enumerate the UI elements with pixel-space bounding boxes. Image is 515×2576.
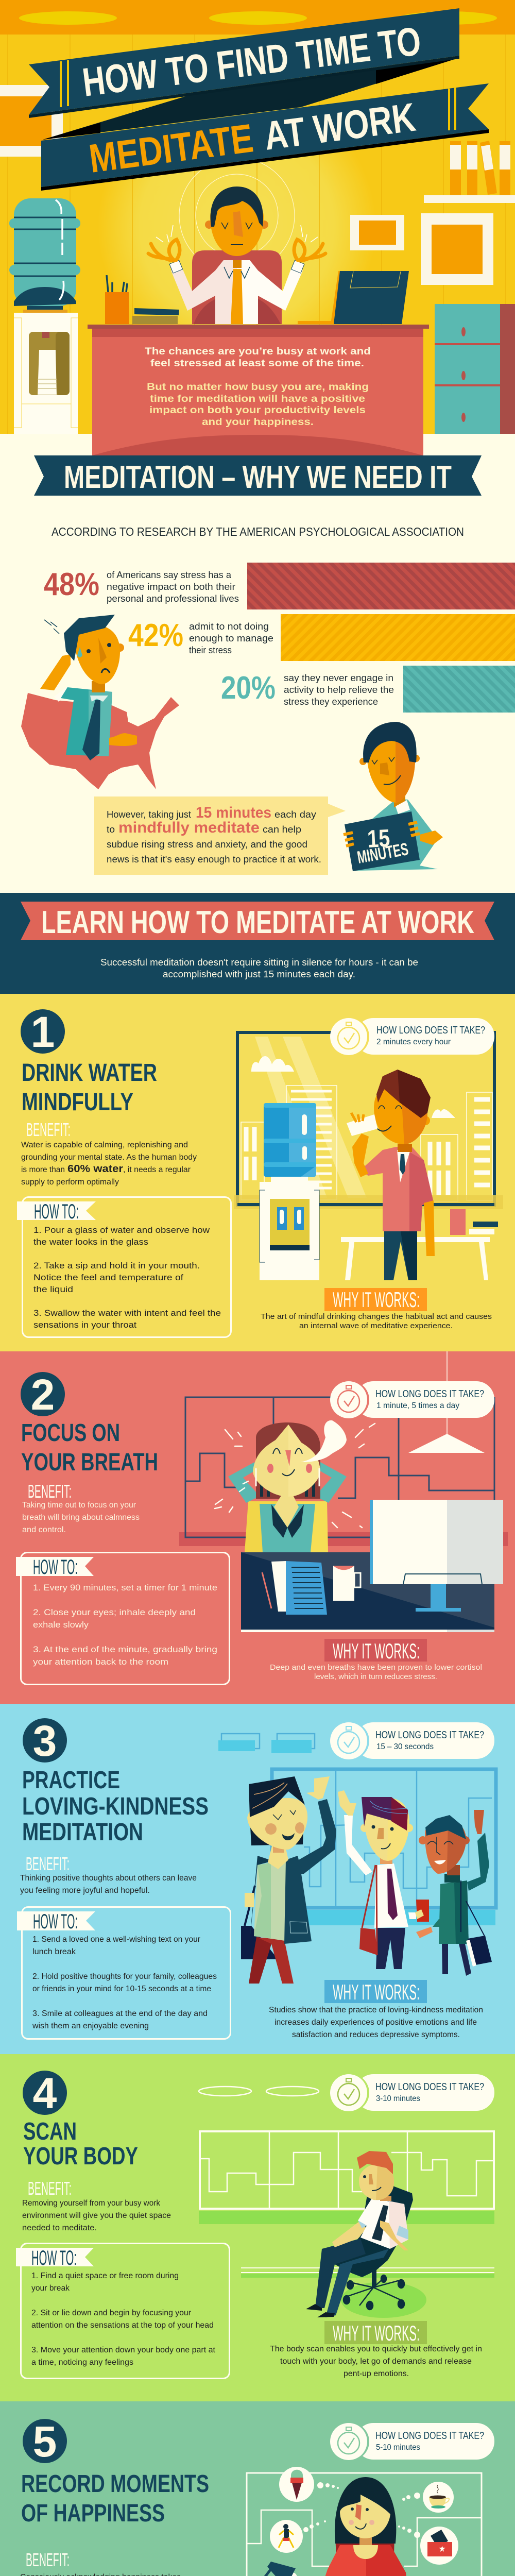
callout: 15 minutes: However, taking just (107, 809, 191, 820)
how to box: lunch break (32, 1947, 76, 1956)
how to box: or friends in your mind for 10-15 seconds at a time (32, 1985, 211, 1993)
desk items (105, 271, 409, 324)
stat bar 20%: 20% (221, 670, 276, 706)
why it works (269, 1980, 483, 2039)
usa map (21, 693, 179, 789)
figure: woman waving (241, 1776, 336, 1984)
how to box: a time, noticing any feelings (31, 2358, 133, 2367)
stat bar 48%: of Americans say stress has a (107, 570, 232, 580)
how to box: 3. Smile at colleagues at the end of the day and (32, 2009, 208, 2018)
duration pill: 5-10 minutes (376, 2443, 420, 2452)
heading: PRACTICE (22, 1767, 120, 1794)
number badge (21, 1008, 65, 1056)
figure: man holding 15 minutes sign (344, 722, 443, 871)
duration pill: HOW LONG DOES IT TAKE? (375, 1388, 484, 1400)
benefit: , it needs a regular (123, 1165, 191, 1174)
panel: desk with intro text: The chances are you’re busy at work and (145, 346, 371, 357)
callout: 15 minutes (94, 796, 346, 875)
benefit: supply to perform optimally (21, 1178, 119, 1187)
how to box: your attention back to the room (33, 1657, 168, 1667)
why it works: levels, which in turn reduces stress. (314, 1672, 437, 1681)
heading (22, 1767, 209, 1846)
how to box: the liquid (33, 1284, 73, 1294)
stat bar 42%: 42% (128, 618, 183, 653)
figure: man in office chair (306, 2151, 413, 2317)
how to box: your break (31, 2284, 70, 2293)
how to box: the water looks in the glass (33, 1237, 148, 1247)
benefit: you feeling more joyful and hopeful. (20, 1886, 150, 1895)
benefit: BENEFIT: (26, 1119, 71, 1140)
how to box: sensations in your throat (33, 1320, 136, 1330)
how to box: 3. At the end of the minute, gradually bring (33, 1645, 217, 1654)
heading: MINDFULLY (22, 1089, 133, 1116)
heading (22, 1059, 157, 1116)
figure: smiling colleague (416, 1810, 492, 1976)
duration pill: 15 – 30 seconds (376, 1742, 434, 1751)
why it works: Studies show that the practice of loving-kindness meditation (269, 2006, 483, 2014)
panel: desk with intro text: time for meditation will have a positive (150, 394, 365, 404)
subheading: ACCORDING TO RESEARCH BY THE AMERICAN PSYCHOLOGICAL ASSOCIATION (52, 525, 464, 538)
duration pill: 2 minutes every hour (376, 1038, 451, 1046)
how to box (17, 1197, 231, 1337)
how to box (16, 2243, 230, 2378)
benefit: Thinking positive thoughts about others can leave (20, 1874, 197, 1883)
callout: 15 minutes: to (107, 824, 115, 835)
callout: 15 minutes: can help (263, 824, 301, 835)
how to box: Notice the feel and temperature of (33, 1273, 183, 1282)
window scene (234, 1032, 503, 1209)
filing cabinet (435, 304, 515, 434)
benefit: BENEFIT: (28, 2178, 72, 2199)
icon: desk lamp (249, 2562, 297, 2576)
benefit: grounding your mental state. As the human body (21, 1153, 197, 1162)
how to box: 3. Move your attention down your body one part at (31, 2346, 216, 2354)
benefit: BENEFIT: (26, 2549, 70, 2570)
duration pill: 3-10 minutes (376, 2094, 420, 2103)
heading: FOCUS ON (21, 1419, 120, 1447)
heading (21, 2470, 209, 2527)
panel: desk with intro text: feel stressed at least some of the time. (150, 358, 364, 369)
figure: man holding 15 minutes sign: MINUTES (356, 839, 410, 868)
stat bar 20%: say they never engage in (284, 673, 393, 683)
intro text: Successful meditation doesn't require sitting in silence for hours - it can be (100, 957, 418, 968)
desk with monitor (241, 1500, 503, 1632)
duration pill (330, 2422, 494, 2461)
stat bar 20%: stress they experience (284, 697, 378, 707)
panel: step 2 focus on your breath (0, 1351, 515, 1704)
benefit (20, 2549, 181, 2576)
heading: DRINK WATER (22, 1059, 157, 1087)
benefit: is more than (21, 1165, 65, 1174)
stat bar 48%: negative impact on both their (107, 582, 235, 592)
how to box: HOW TO: (34, 1200, 79, 1223)
figure: meditating man at desk (148, 187, 325, 324)
table (341, 1209, 498, 1280)
why it works: an internal wave of meditative experience. (299, 1321, 453, 1330)
duration pill: HOW LONG DOES IT TAKE? (375, 1730, 484, 1741)
benefit: Water is capable of calming, replenishing and (21, 1141, 188, 1149)
benefit: Taking time out to focus on your (22, 1501, 136, 1510)
heading: OF HAPPINESS (21, 2500, 165, 2527)
intro text: accomplished with just 15 minutes each day. (163, 969, 355, 979)
why it works: WHY IT WORKS: (333, 1980, 420, 2004)
why it works: touch with your body, let go of demands and release (280, 2357, 472, 2366)
heading: RECORD MOMENTS (21, 2470, 209, 2498)
benefit: Removing yourself from your busy work (22, 2199, 160, 2208)
panel: step 4 scan your body (0, 2054, 515, 2401)
how to box: 1. Send a loved one a well-wishing text on your (32, 1935, 200, 1944)
heading: LOVING-KINDNESS (22, 1793, 209, 1820)
stat bar 48%: 48% (44, 567, 99, 602)
duration pill (330, 1018, 494, 1056)
ceiling with lights (0, 0, 515, 35)
benefit: BENEFIT: (28, 1481, 72, 1502)
office window outline (179, 1351, 508, 1546)
how to box: 1. Every 90 minutes, set a timer for 1 minute (33, 1583, 217, 1592)
why it works: WHY IT WORKS: (333, 1639, 420, 1663)
why it works: increases daily experiences of positive emotions and life (274, 2018, 477, 2027)
how to box (16, 1553, 230, 1685)
figure: man holding 15 minutes sign: 15 (367, 825, 391, 853)
callout: 15 minutes: 15 minutes (196, 804, 271, 821)
number badge (23, 1717, 67, 1765)
panel: step 3 loving-kindness (0, 1704, 515, 2054)
duration pill: HOW LONG DOES IT TAKE? (376, 1025, 485, 1036)
duration pill: 1 minute, 5 times a day (376, 1401, 459, 1410)
stat bar 42% (128, 614, 515, 661)
figure: man drinking water (347, 1070, 435, 1280)
benefit (20, 1853, 197, 1895)
why it works: satisfaction and reduces depressive symptoms. (292, 2030, 460, 2039)
panel: desk with intro text: and your happiness. (202, 417, 314, 428)
benefit (21, 1119, 197, 1187)
benefit: needed to meditate. (22, 2224, 97, 2232)
benefit: 60% water (67, 1163, 123, 1175)
figure: stressed man (40, 615, 137, 760)
how to box: 2. Hold positive thoughts for your family, colleagues (32, 1972, 217, 1981)
benefit (22, 1481, 140, 1534)
office window (238, 2473, 491, 2576)
wall picture left (0, 85, 63, 157)
why it works: WHY IT WORKS: (333, 2321, 420, 2345)
panel: step 5 record moments of happiness (0, 2401, 515, 2576)
panel: learn how to meditate (0, 893, 515, 994)
office window (199, 2131, 494, 2318)
office window (272, 1769, 496, 1925)
number badge: 5 (33, 2417, 57, 2466)
number badge (23, 2417, 67, 2466)
thought bubbles (270, 2467, 458, 2565)
ceiling lights outline (199, 2087, 319, 2096)
how to box: 2. Close your eyes; inhale deeply and (33, 1607, 196, 1617)
figure: woman breathing (215, 1420, 375, 1552)
panel: why we need it (0, 455, 515, 893)
duration pill (330, 1381, 494, 1419)
how to box: 2. Sit or lie down and begin by focusing your (31, 2309, 191, 2317)
how to box: 3. Swallow the water with intent and feel the (33, 1308, 221, 1318)
callout: 15 minutes: subdue rising stress and anxiety, and the good (107, 839, 307, 850)
benefit: environment will give you the quiet space (22, 2211, 171, 2220)
stat bar 42%: enough to manage (189, 633, 273, 643)
figure: woman journaling (317, 2477, 412, 2576)
number badge: 2 (31, 1370, 55, 1419)
heading: SCAN (23, 2118, 77, 2145)
intro text (100, 957, 418, 979)
number badge: 3 (33, 1717, 57, 1765)
how to box: exhale slowly (33, 1620, 89, 1630)
wall frames (350, 213, 493, 285)
heading: MEDITATION (22, 1819, 143, 1846)
duration pill: HOW LONG DOES IT TAKE? (375, 2430, 484, 2442)
shelf with binders (424, 141, 515, 203)
how to box: 2. Take a sip and hold it in your mouth. (33, 1261, 200, 1270)
heading: YOUR BODY (23, 2143, 138, 2170)
stat bar 42%: their stress (189, 645, 232, 655)
number badge: 1 (31, 1008, 55, 1056)
stat bar 42%: admit to not doing (189, 621, 269, 632)
heading (23, 2118, 138, 2170)
how to box: attention on the sensations at the top of your head (31, 2321, 214, 2330)
ceiling window deco (218, 1734, 315, 1753)
icon: water cooler (9, 198, 80, 434)
benefit: and control. (22, 1526, 66, 1534)
number badge (23, 2069, 67, 2117)
stat bar 20%: activity to help relieve the (284, 685, 394, 695)
callout: 15 minutes: mindfully meditate (118, 819, 260, 836)
number badge: 4 (33, 2069, 57, 2117)
title ribbon: HOW TO FIND TIME TO (80, 18, 423, 105)
stat bar 20% (221, 666, 515, 713)
benefit: BENEFIT: (26, 1853, 70, 1874)
how to box: HOW TO: (33, 1556, 78, 1579)
hands (148, 240, 325, 261)
title ribbon: AT WORK (262, 94, 418, 159)
why it works (270, 2321, 482, 2378)
how to box: 1. Pour a glass of water and observe how (33, 1225, 210, 1235)
panel: desk with intro text: impact on both your productivity levels (149, 405, 366, 416)
meditation halo (179, 158, 295, 273)
how to box (17, 1907, 231, 2039)
how to box: 1. Find a quiet space or free room during (31, 2272, 179, 2280)
thought dots (303, 2482, 420, 2538)
title ribbon (29, 8, 489, 191)
why it works (261, 1287, 492, 1330)
panel: desk with intro text: But no matter how busy you are, making (147, 382, 369, 393)
why it works (270, 1639, 482, 1681)
why it works: The art of mindful drinking changes the habitual act and causes (261, 1312, 492, 1321)
stat bar 48%: personal and professional lives (107, 594, 239, 604)
benefit: breath will bring about calmness (22, 1513, 140, 1522)
heading (21, 1419, 158, 1476)
title ribbon: MEDITATE (87, 115, 256, 181)
why it works: Deep and even breaths have been proven to lower cortisol (270, 1663, 482, 1672)
why it works: The body scan enables you to quickly but effectively get in (270, 2345, 482, 2353)
icon: water cooler blue (260, 1103, 319, 1280)
how to box: HOW TO: (31, 2247, 77, 2269)
callout: 15 minutes: each day (274, 809, 316, 820)
stat bar 48% (44, 563, 515, 609)
why it works: WHY IT WORKS: (333, 1287, 420, 1312)
callout: 15 minutes: news is that it's easy enough to practice it at work. (107, 854, 321, 865)
how to box: HOW TO: (33, 1910, 78, 1933)
benefit (22, 2178, 171, 2232)
heading: YOUR BREATH (21, 1449, 158, 1476)
duration pill (330, 2074, 494, 2112)
panel: step 1 drink water mindfully (0, 994, 515, 1351)
how to box: wish them an enjoyable evening (32, 2022, 149, 2030)
number badge (21, 1370, 65, 1419)
panel: office hero (0, 0, 515, 457)
duration pill: HOW LONG DOES IT TAKE? (375, 2081, 484, 2093)
figure: man with bag (338, 1790, 429, 1969)
duration pill (330, 1722, 494, 1760)
why it works: pent-up emotions. (344, 2369, 409, 2378)
panel: desk with intro text (88, 325, 429, 455)
